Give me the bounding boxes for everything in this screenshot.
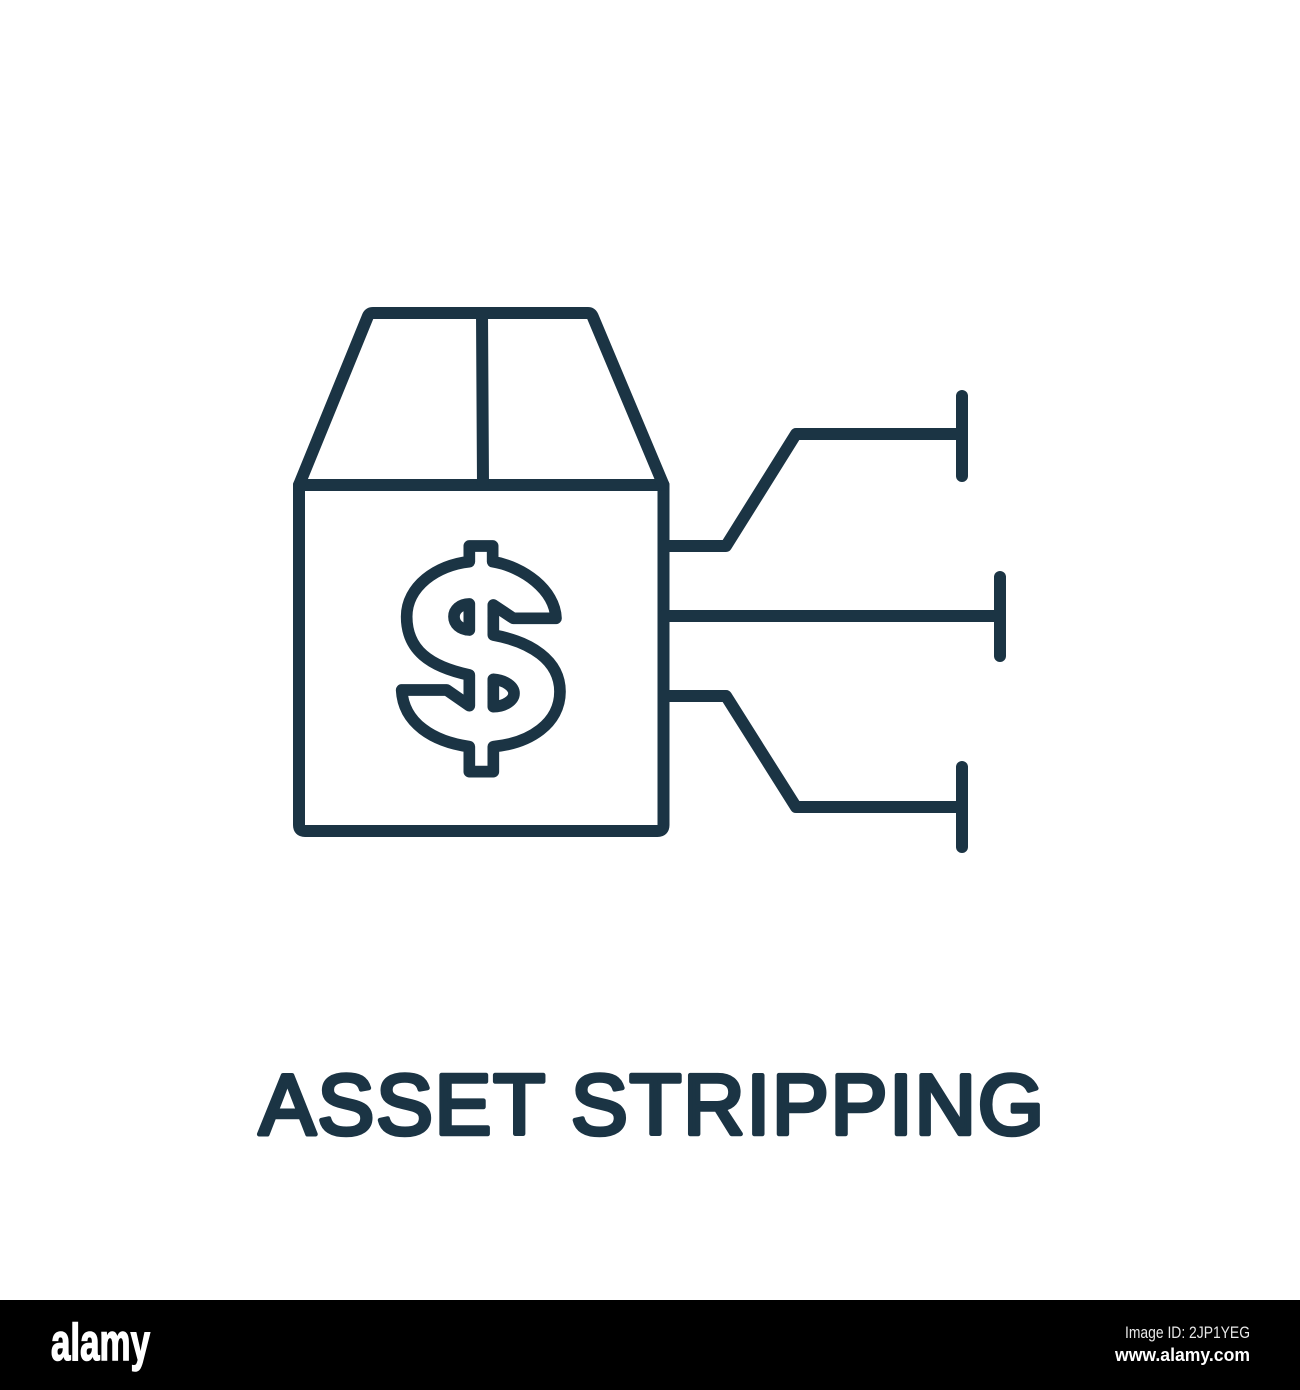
icon: dollar sign xyxy=(402,546,560,772)
title: ASSET STRIPPING xyxy=(259,1058,1044,1153)
footer logo: alamy xyxy=(51,1314,150,1372)
icon: asset stripping box with branches xyxy=(299,313,1000,847)
icon: box body xyxy=(299,485,664,831)
icon: box lid xyxy=(299,313,664,485)
footer bar xyxy=(0,1300,1300,1390)
icon: lower branch xyxy=(664,696,962,847)
website: www.alamy.com xyxy=(1114,1345,1250,1365)
image id: Image ID: 2JP1YEG xyxy=(1125,1323,1250,1342)
icon: middle branch xyxy=(664,577,1000,656)
icon: upper branch xyxy=(664,396,962,546)
